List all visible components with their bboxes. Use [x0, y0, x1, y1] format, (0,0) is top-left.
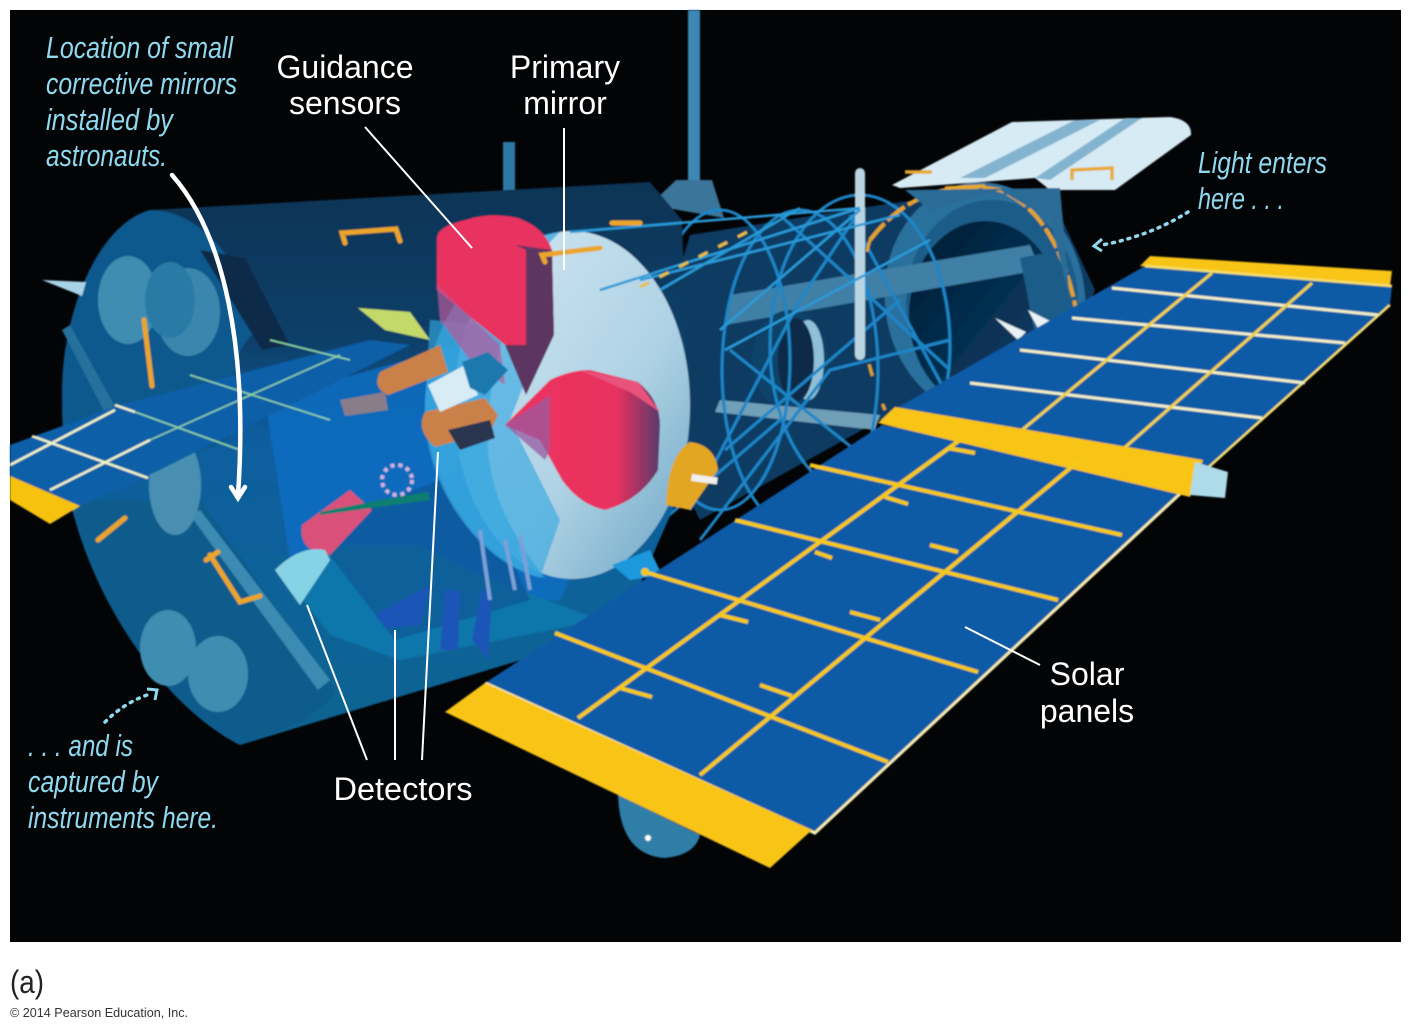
label: guidance sensors: sensors: [289, 85, 401, 121]
gold handrails: [98, 223, 640, 602]
label: guidance sensors: Guidance: [277, 49, 413, 85]
instrument cluster: [275, 308, 530, 660]
label: primary mirror: Primary: [510, 49, 620, 85]
arrow: light enters: [1094, 212, 1188, 251]
antenna mast: [503, 10, 724, 218]
copyright: © 2014 Pearson Education, Inc.: [10, 1006, 188, 1020]
figure tag: (a): [10, 964, 44, 1000]
label: captured by: captured by: [28, 764, 160, 799]
label: detectors: Detectors: [334, 771, 472, 807]
label: solar panels: panels: [1040, 693, 1134, 729]
small left solar panel: [10, 340, 410, 524]
label: instruments here: instruments here.: [28, 800, 218, 835]
gold trunnion: [666, 442, 718, 510]
label: primary mirror: mirror: [523, 85, 607, 121]
vertical boom: [855, 168, 865, 360]
label: corrective mirrors line 4: astronauts.: [46, 138, 167, 173]
cylinders on aft bulkhead: [42, 256, 248, 712]
aft shroud body: [62, 182, 690, 745]
primary mirror disc: [425, 231, 690, 580]
label: and is: . . . and is: [28, 728, 133, 763]
label: corrective mirrors line 2: corrective mirrors: [46, 66, 237, 101]
label: corrective mirrors line 3: installed by: [46, 102, 175, 137]
aperture door: [892, 117, 1191, 300]
antenna dish: [618, 795, 700, 858]
telescope truss and light shield: [640, 169, 1100, 540]
label: here: here . . .: [1198, 181, 1284, 216]
label: corrective mirrors: Location of small: [46, 30, 234, 65]
near solar panel: [445, 407, 1228, 868]
label: solar panels: Solar: [1050, 656, 1125, 692]
far solar panel: [890, 256, 1392, 480]
guidance sensors: [437, 215, 660, 510]
arrow: captured by instruments: [105, 689, 157, 722]
arrow: corrective mirrors: [172, 175, 245, 498]
mesh over forward bulkhead: [570, 208, 930, 350]
leader lines: [307, 127, 1040, 760]
label: light enters: Light enters: [1198, 145, 1327, 180]
